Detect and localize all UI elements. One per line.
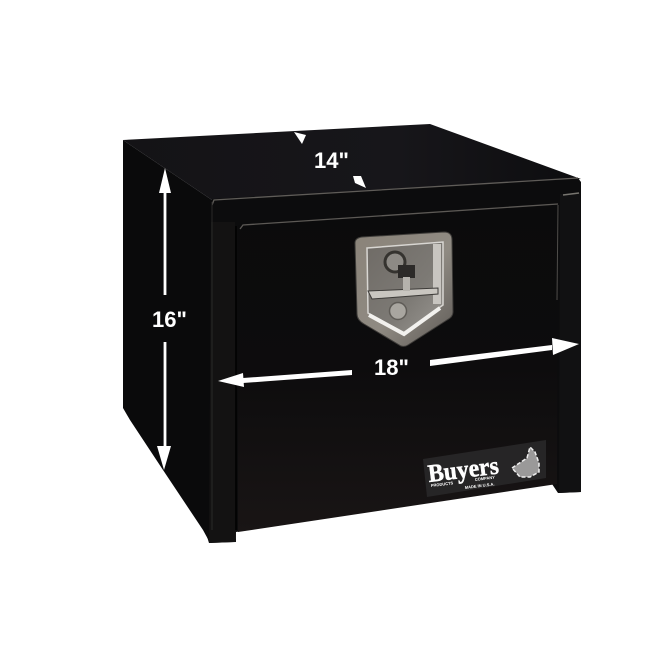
dimension: 16 inch height: 16" bbox=[152, 307, 187, 332]
door right edge highlight bbox=[557, 205, 558, 300]
dimension: 16 inch height bbox=[152, 168, 187, 470]
door panel bbox=[238, 204, 558, 532]
top panel bbox=[123, 124, 581, 200]
right front post bbox=[559, 193, 581, 493]
left seam bbox=[211, 202, 213, 530]
brand badge: MADE IN U.S.A. bbox=[465, 481, 495, 490]
handle head bbox=[398, 265, 415, 278]
t-handle latch bbox=[355, 232, 453, 346]
dimension: 18 inch width bbox=[218, 338, 579, 387]
badge wordmark: Buyers bbox=[426, 452, 500, 488]
latch plate bbox=[355, 232, 453, 346]
rivet bbox=[390, 302, 406, 320]
badge subtext: PRODUCTS bbox=[431, 480, 454, 488]
front frame bbox=[205, 178, 581, 543]
dimension: 18 inch width: 18" bbox=[374, 355, 409, 380]
badge mascot bbox=[512, 447, 539, 477]
dimension: 14 inch depth bbox=[294, 132, 366, 188]
upper-right trim highlight bbox=[563, 193, 579, 195]
door top highlight bbox=[240, 204, 558, 229]
toolbox body bbox=[123, 124, 581, 543]
lock cylinder bbox=[385, 252, 405, 272]
handle stem bbox=[403, 277, 410, 291]
frame top highlight bbox=[212, 178, 578, 205]
dimension: 14 inch depth: 14" bbox=[314, 148, 349, 173]
left front post bbox=[209, 222, 236, 543]
brand badge bbox=[423, 440, 546, 497]
t-handle bar bbox=[368, 288, 438, 299]
recess bright rim bbox=[369, 308, 440, 334]
recess right strip bbox=[433, 244, 441, 304]
brand badge: COMPANY bbox=[475, 475, 495, 482]
left side panel bbox=[123, 140, 212, 543]
latch recess bbox=[367, 242, 443, 333]
